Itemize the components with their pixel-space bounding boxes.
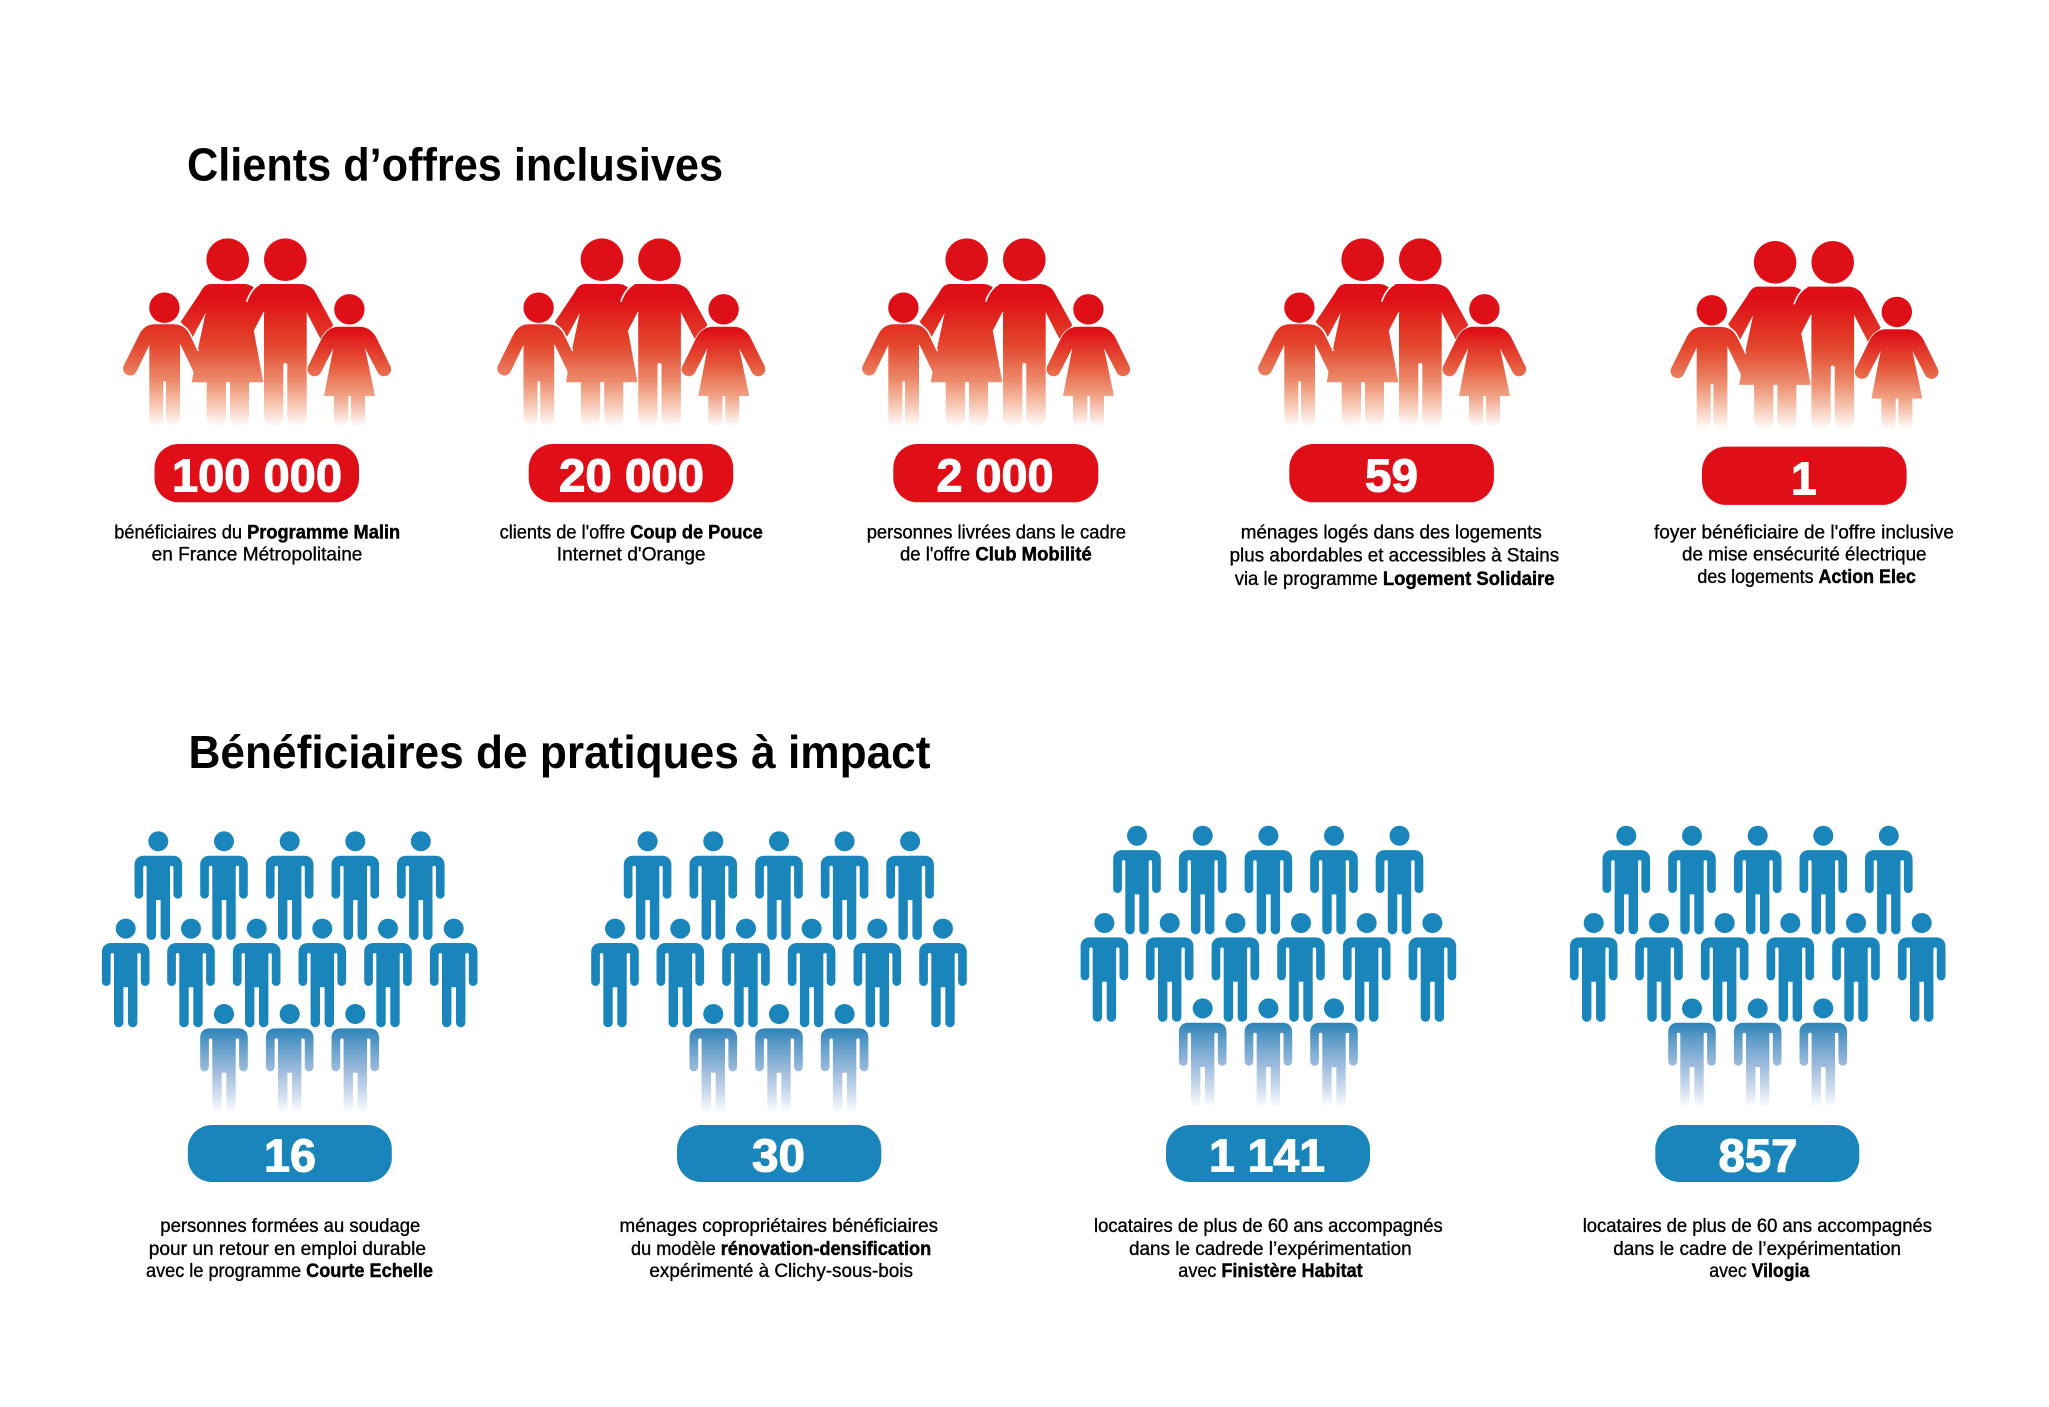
description: via le programme Logement Solidaire (1235, 568, 1555, 590)
number badge: 30 (677, 1125, 881, 1182)
description (867, 521, 1126, 566)
description: foyer bénéficiaire de l'offre inclusive (1654, 521, 1954, 543)
panel: rénovation-densification (591, 831, 967, 1282)
description: dans le cadre de l’expérimentation (1613, 1238, 1901, 1260)
icon: crowd of people (1081, 826, 1456, 1107)
icon: crowd of people (591, 831, 967, 1113)
description (1583, 1215, 1932, 1282)
description: Internet d'Orange (557, 544, 706, 566)
description: bénéficiaires du Programme Malin (114, 521, 400, 543)
panel: Logement Solidaire (1230, 238, 1559, 590)
description: pour un retour en emploi durable (149, 1238, 426, 1260)
panel: Action Elec (1654, 241, 1954, 588)
description: ménages copropriétaires bénéficiaires (620, 1215, 938, 1237)
number badge: 857 (1655, 1125, 1859, 1182)
description: de mise ensécurité électrique (1682, 544, 1926, 566)
number badge: 20 000 (529, 444, 733, 502)
icon: family (862, 238, 1130, 427)
number badge: 2 000 (893, 444, 1098, 502)
icon: family (1671, 241, 1938, 430)
panel: Vilogia (1570, 826, 1946, 1282)
panel: Club Mobilité (862, 238, 1130, 566)
description: avec Vilogia (1709, 1260, 1809, 1282)
description: plus abordables et accessibles à Stains (1230, 545, 1559, 567)
title: Clients d'offres inclusives: Clients d’offres inclusives (187, 138, 723, 190)
number badge: 100 000: 100 000 (172, 450, 342, 502)
number badge: 1 141 (1166, 1125, 1370, 1182)
description: avec le programme Courte Echelle (146, 1260, 433, 1282)
number badge: 16 (188, 1125, 392, 1182)
icon: crowd of people (102, 831, 478, 1113)
icon: family (497, 238, 765, 427)
description: personnes livrées dans le cadre (867, 521, 1126, 543)
description (114, 521, 400, 566)
number badge: 59 (1289, 444, 1494, 502)
description: dans le cadrede l’expérimentation (1129, 1238, 1412, 1260)
number badge: 857: 857 (1718, 1130, 1798, 1182)
description: du modèle rénovation-densification (631, 1238, 931, 1260)
description: expérimenté à Clichy-sous-bois (649, 1260, 913, 1282)
description (500, 521, 763, 566)
description (1654, 521, 1954, 588)
number badge: 1 141: 1 141 (1209, 1130, 1325, 1182)
panel: Finistère Habitat (1081, 826, 1456, 1282)
number badge: 30: 30 (752, 1130, 805, 1182)
description (620, 1215, 938, 1282)
panel: Programme Malin (114, 238, 400, 566)
description: personnes formées au soudage (160, 1215, 420, 1237)
description: de l'offre Club Mobilité (900, 544, 1092, 566)
description (1094, 1215, 1443, 1282)
description: avec Finistère Habitat (1178, 1260, 1363, 1282)
panel: Coup de Pouce (497, 238, 765, 566)
description: clients de l'offre Coup de Pouce (500, 521, 763, 543)
description: locataires de plus de 60 ans accompagnés (1583, 1215, 1932, 1237)
number badge: 59: 59 (1365, 450, 1418, 502)
number badge: 16: 16 (264, 1130, 316, 1182)
number badge: 20 000: 20 000 (559, 450, 704, 502)
number badge: 1: 1 (1791, 452, 1817, 504)
description: ménages logés dans des logements (1241, 521, 1542, 543)
description (146, 1215, 433, 1282)
description: en France Métropolitaine (152, 544, 362, 566)
number badge: 1 (1702, 447, 1907, 505)
icon: crowd of people (1570, 826, 1946, 1107)
icon: family (1258, 238, 1526, 427)
number badge: 2 000: 2 000 (936, 450, 1054, 502)
panel: Courte Echelle (102, 831, 478, 1282)
description: des logements Action Elec (1697, 566, 1916, 588)
description (1230, 521, 1559, 590)
title: Bénéficiaires de pratiques à impact: Bénéficiaires de pratiques à impact (188, 726, 930, 778)
icon: family (123, 238, 391, 427)
description: locataires de plus de 60 ans accompagnés (1094, 1215, 1443, 1237)
